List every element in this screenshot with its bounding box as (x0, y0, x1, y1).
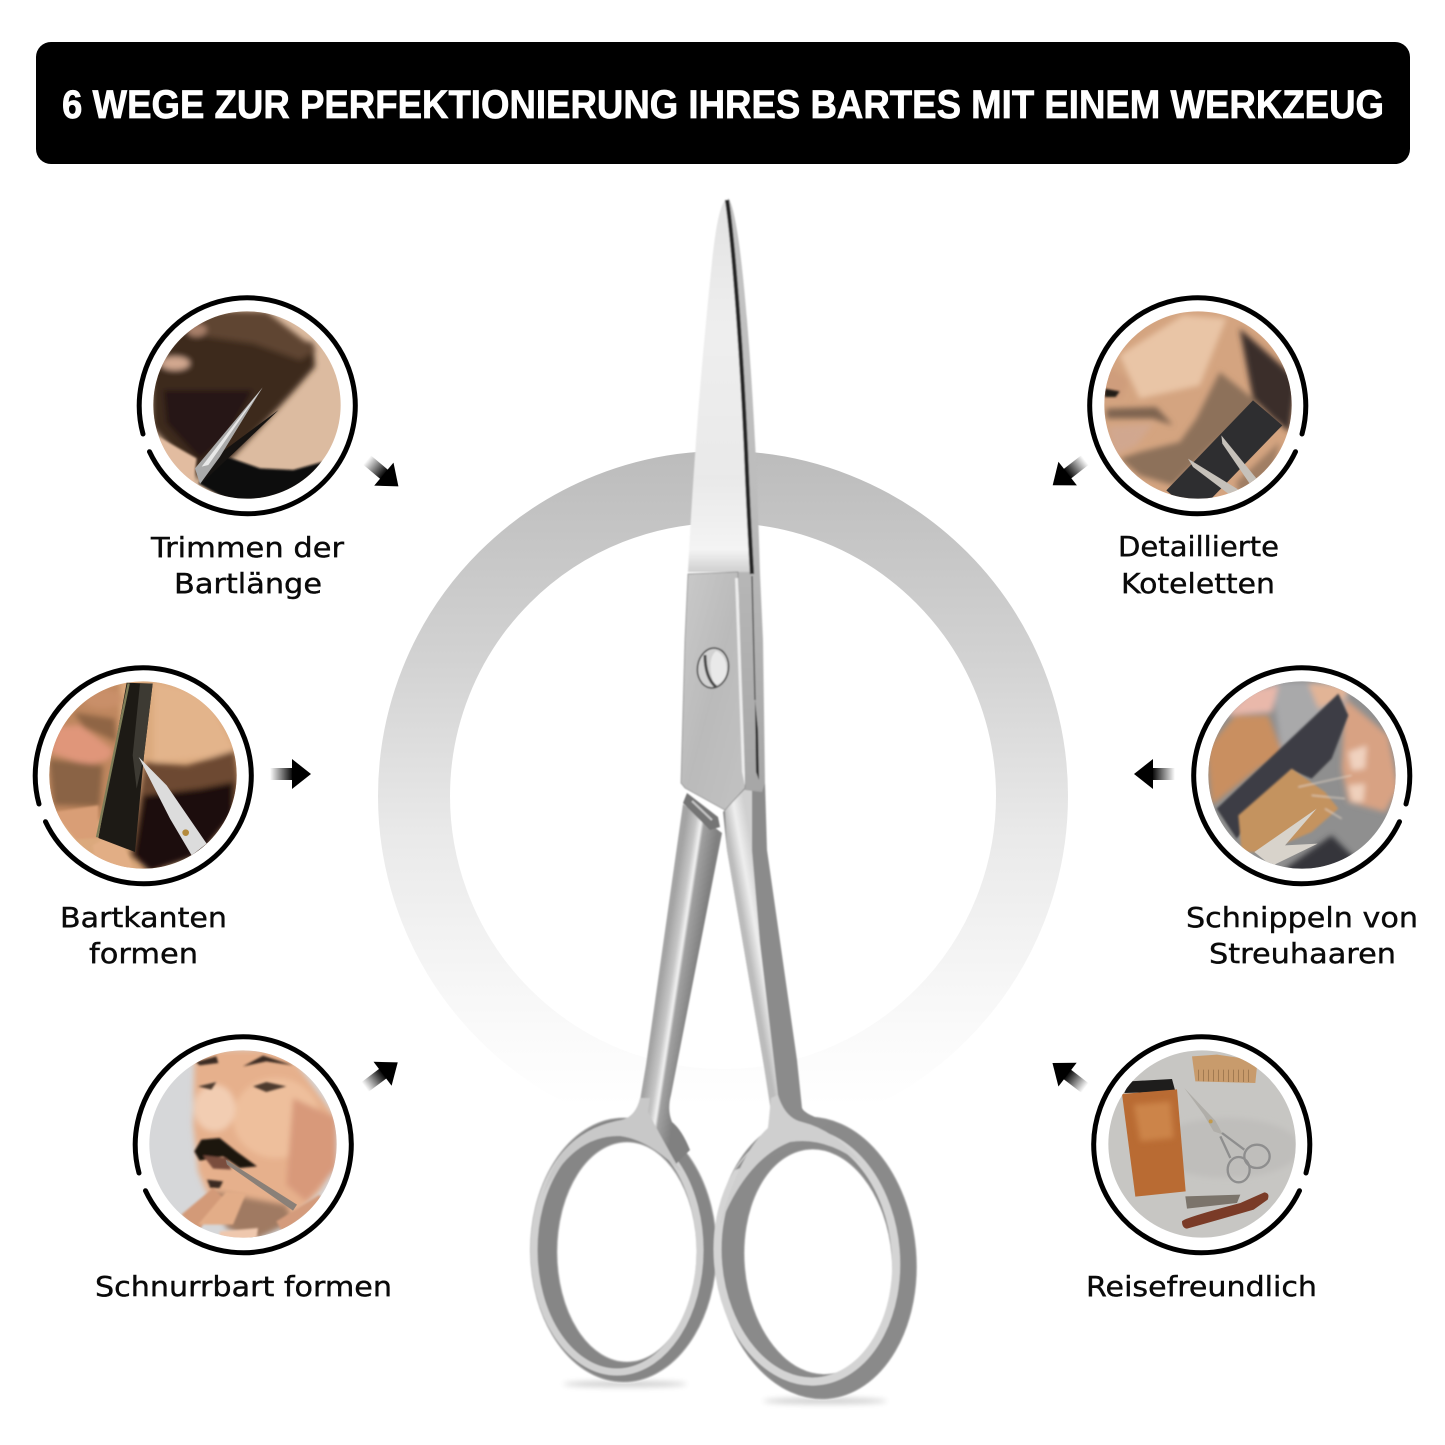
arrow (270, 759, 311, 789)
photo: comb and scissors on beard edge (47, 679, 240, 872)
label: Schnippeln von (1186, 901, 1418, 934)
right shank dark side (723, 783, 830, 1170)
ring (1094, 1037, 1310, 1253)
label (1118, 530, 1279, 600)
ring (35, 668, 251, 884)
ground shadow (563, 1381, 887, 1404)
label: formen (89, 937, 198, 970)
ring (1090, 298, 1306, 514)
label (60, 901, 227, 970)
lower slit (755, 700, 759, 780)
label: Detaillierte (1118, 530, 1279, 563)
label: Schnurrbart formen (95, 1270, 392, 1303)
blade edge shadow (727, 200, 752, 574)
label: Trimmen der (150, 531, 345, 564)
screw (695, 646, 731, 690)
ring (139, 298, 355, 514)
label: Bartlänge (174, 567, 322, 600)
front blade (688, 199, 750, 572)
arrow (356, 1050, 407, 1099)
panel: Schnippeln von Streuhaaren (1186, 668, 1418, 970)
label: Reisefreundlich (1086, 1270, 1317, 1303)
photo: beard trimming (153, 311, 341, 499)
photo: man trimming moustache (146, 1048, 340, 1241)
arrow (1043, 448, 1094, 497)
back blade strip (728, 198, 765, 792)
arrow (1043, 1051, 1094, 1100)
panel: Trimmen der Bartlänge (139, 298, 355, 600)
panel: Detaillierte Koteletten (1090, 298, 1306, 600)
shank slot (683, 793, 720, 830)
label: Bartkanten (60, 901, 227, 934)
label (150, 531, 345, 600)
ring (135, 1037, 351, 1253)
scissors (530, 198, 928, 1407)
plate highlight (735, 578, 745, 786)
photo: sideburn detail with comb (1103, 309, 1296, 502)
panel: Bartkanten formen (35, 668, 251, 970)
photo: snipping stray hairs (1205, 679, 1398, 875)
left shank (615, 804, 722, 1165)
centre line (752, 576, 755, 700)
arrow (357, 449, 408, 498)
label: Koteletten (1121, 567, 1275, 600)
right shank junction highlight (719, 1095, 862, 1228)
left finger ring (530, 1118, 716, 1382)
arrow (1134, 759, 1175, 789)
label: Streuhaaren (1209, 937, 1396, 970)
label (1186, 901, 1418, 970)
title banner (36, 42, 1410, 164)
panel: Reisefreundlich (1086, 1037, 1317, 1303)
panel: Schnurrbart formen (95, 1037, 392, 1303)
pivot plate (681, 572, 745, 810)
photo: travel kit flat lay (1104, 1048, 1300, 1245)
right finger ring (704, 1109, 928, 1407)
background gradient ring (414, 487, 1032, 1105)
ring (1194, 668, 1410, 884)
right shank light side (725, 787, 778, 1112)
left shank junction highlight (543, 1098, 681, 1195)
